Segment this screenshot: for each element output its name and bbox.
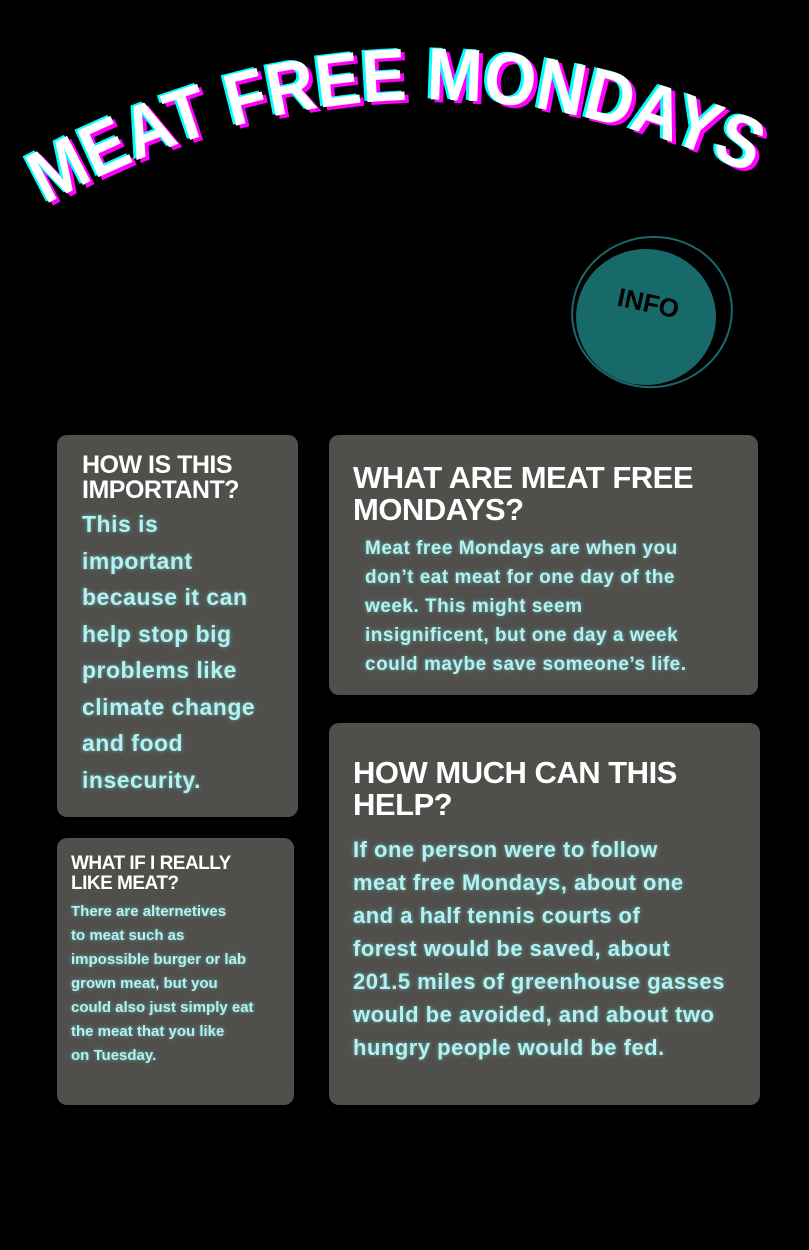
info badge: INFO [615,282,682,324]
body text [363,538,687,676]
body text: week. This might seem [365,596,582,617]
body text: the meat that you like [71,1023,224,1040]
body text: Meat free Mondays are when you [365,538,678,559]
title: MEAT FREE MONDAYS [40,52,767,206]
panel: how much can this help [329,723,760,1105]
heading: WHAT IF I REALLY [71,853,231,874]
body text: and a half tennis courts of [353,903,640,928]
body text: to meat such as [71,927,184,944]
body text: 201.5 miles of greenhouse gasses [353,969,725,994]
body text: This is [82,511,158,537]
body text: If one person were to follow [353,837,658,862]
body text: insecurity. [82,766,201,792]
heading: IMPORTANT? [82,476,239,504]
heading [82,451,239,504]
body text: don’t eat meat for one day of the [365,567,675,588]
heading: WHAT ARE MEAT FREE [353,460,693,495]
body text [80,511,256,795]
body text: climate change [82,694,255,720]
body text [351,837,726,1062]
body text: problems like [82,657,237,683]
panel: what if i really like meat [57,838,294,1105]
body text: help stop big [82,620,232,646]
heading [71,853,231,894]
body text: insignificent, but one day a week [365,625,678,646]
body text: meat free Mondays, about one [353,870,684,895]
heading [353,755,677,822]
body text [69,903,255,1064]
body text: grown meat, but you [71,975,218,992]
heading: HELP? [353,787,452,822]
info badge [571,236,733,388]
body text: important [82,548,193,574]
heading: HOW MUCH CAN THIS [353,755,677,790]
panel: how is this important [57,435,298,817]
body text: There are alternetives [71,903,226,920]
body text: because it can [82,584,248,610]
body text: could maybe save someone’s life. [365,654,687,675]
heading: LIKE MEAT? [71,873,179,894]
title: MEAT FREE MONDAYS [26,48,763,203]
body text: impossible burger or lab [71,951,246,968]
body text: on Tuesday. [71,1047,156,1064]
heading: HOW IS THIS [82,451,232,479]
body text: could also just simply eat [71,999,254,1016]
body text: and food [82,730,183,756]
body text: would be avoided, and about two [353,1002,714,1027]
title: MEAT FREE MONDAYS [22,47,758,202]
body text: forest would be saved, about [353,936,670,961]
panel: what are meat free mondays [329,435,758,695]
heading: MONDAYS? [353,492,524,527]
heading [353,460,693,527]
body text: hungry people would be fed. [353,1035,665,1060]
